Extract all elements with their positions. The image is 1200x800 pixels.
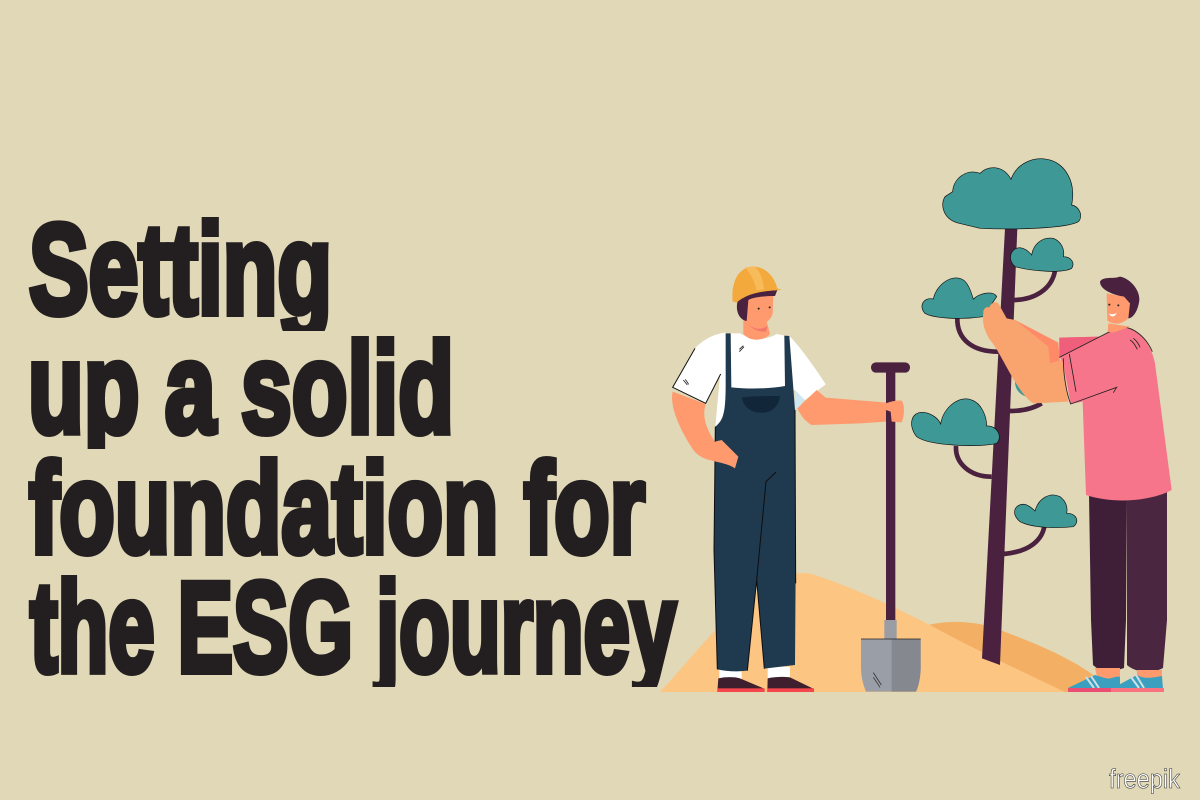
man near arm and hand [983, 302, 1068, 403]
worker socks and shoes [717, 667, 814, 692]
worker hard hat [732, 267, 782, 303]
worker overalls [693, 333, 796, 671]
worker with shovel [672, 267, 921, 692]
freepik credit: freepik [1109, 764, 1180, 794]
man trousers [1089, 490, 1167, 672]
man ankles and sneakers [1068, 668, 1164, 692]
man far arm [1015, 320, 1060, 363]
headline line 3: foundation for [29, 438, 645, 580]
man holding tree [983, 277, 1172, 692]
tree trunk [982, 228, 1017, 665]
man head [1100, 277, 1139, 333]
worker head [737, 290, 777, 340]
shovel [861, 362, 921, 692]
tree [912, 159, 1081, 665]
worker hand on shovel [884, 401, 904, 422]
tree branches [956, 271, 1055, 554]
headline line 4: the ESG journey [30, 556, 676, 700]
headline line 1: Setting [29, 198, 332, 342]
man shirt [1059, 327, 1172, 500]
headline [28, 198, 676, 700]
sand hills [660, 573, 1100, 692]
worker arms [672, 390, 887, 468]
worker shirt [673, 333, 826, 427]
headline line 2: up a solid [28, 318, 454, 460]
tree foliage [912, 159, 1081, 528]
